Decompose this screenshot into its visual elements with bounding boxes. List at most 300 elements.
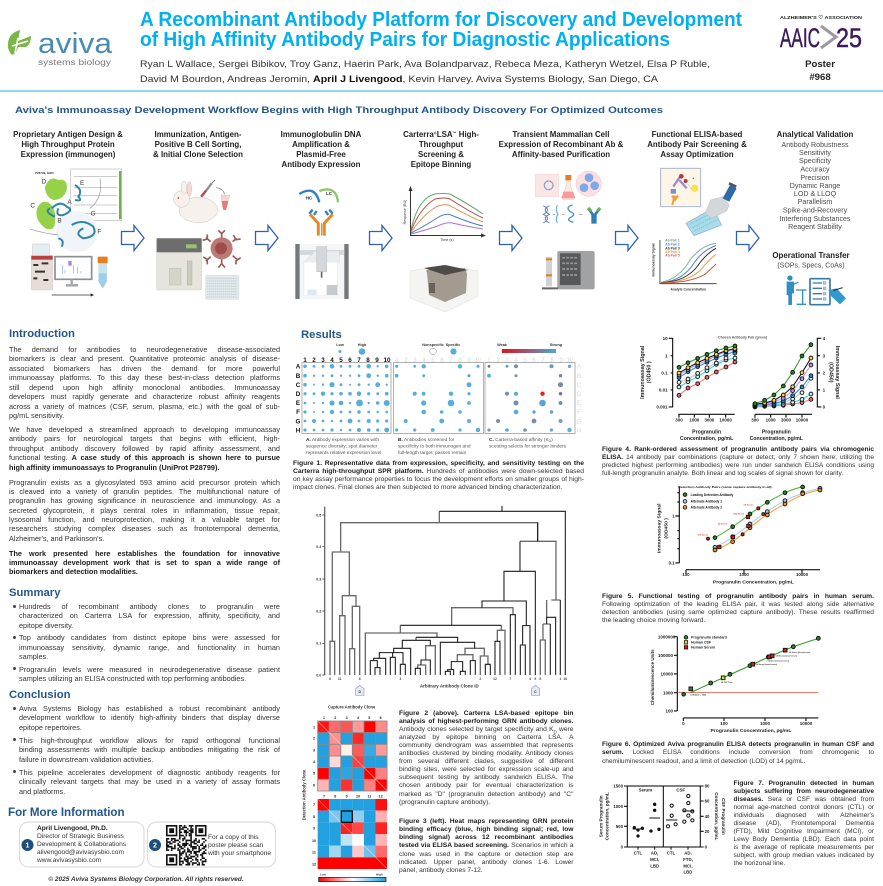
badge C xyxy=(531,685,540,695)
figure 7 chart: patient dot plots: FTD, xyxy=(683,857,693,862)
figure 7 chart: patient dot plots: 20 xyxy=(705,829,710,834)
figure 1 axis labels: 8 xyxy=(550,357,554,364)
figure 4 caption: Figure 4. Rank-ordered assessment of progranulin antibody pairs via chromogenic xyxy=(602,446,874,453)
figure 1 axis labels: F xyxy=(577,409,581,416)
figure 1 caption: impact clones. Final clones are then subjected to more advanced binding characterization. xyxy=(293,484,562,491)
figure 1 axis labels: 10 xyxy=(566,357,574,364)
figure 1 axis labels: H xyxy=(577,428,582,434)
icon: badge 1: 1 xyxy=(26,842,30,850)
figure 1 axis labels: A xyxy=(296,364,301,370)
figure 1 legends: Weak xyxy=(497,343,508,347)
step 4 icon: Carterra instrument xyxy=(410,265,478,312)
poster number: #968 xyxy=(809,72,831,83)
step 1 title: High Throughput Protein xyxy=(21,140,115,149)
figure 3 heat maps: 4 xyxy=(313,760,316,764)
figure 5 chart: serum testing curves: 100 xyxy=(682,572,690,577)
figure 2 dendrogram xyxy=(316,506,568,695)
analytical validation list: Reagent Stability xyxy=(788,223,842,231)
figure 2 dendrogram: 5 xyxy=(539,677,541,681)
analytical validation list: Interfering Substances xyxy=(780,215,851,223)
figure 1 axis labels: B xyxy=(577,373,581,380)
step 3 icons: HC LC arcs, antibody, liquid handler: LC xyxy=(326,191,332,196)
figure 4 chart: log and linear ELISA curves: 3 xyxy=(823,353,826,358)
step 1 icons: protein structure, bioreactor, monitor, tube: D xyxy=(42,178,47,185)
dendrogram branches xyxy=(330,511,560,675)
intro paragraph 3: progranulin has growing significance in neuroscience and immunology. As a xyxy=(9,496,280,505)
figure 4 chart: log and linear ELISA curves xyxy=(640,335,840,442)
intro paragraph 1 xyxy=(9,345,280,420)
step 3 title: Amplification & xyxy=(292,140,350,149)
step 1 icons: protein structure, bioreactor, monitor, tube: F xyxy=(97,228,101,235)
poster number: Poster xyxy=(805,59,835,70)
figure 5 chart: serum testing curves: 0.1 xyxy=(669,561,675,566)
step 2 title xyxy=(153,130,243,159)
color scale bar: Low xyxy=(320,873,327,877)
figure 1 axis labels: 2 xyxy=(496,357,500,364)
figure 4 chart: log and linear ELISA curves: Progranulin xyxy=(762,430,791,436)
figure 2 caption: from several different clades, suggestive of different xyxy=(399,758,574,765)
figure 1 axis labels: G xyxy=(577,418,582,426)
figure 1 axis labels: C xyxy=(296,382,301,389)
figure 1 axis labels: 10 xyxy=(474,357,482,364)
figure 3 caption xyxy=(399,818,574,874)
figure 4 caption: full-length progranulin analyte. Both linear and log scales of signal shown for clarity. xyxy=(602,470,843,477)
summary bullets: samples. xyxy=(19,652,48,661)
figure 3 heat maps: 5 xyxy=(313,772,315,776)
figure 7 chart: patient dot plots: 1000 xyxy=(613,804,624,809)
step 5 icons: cell, flask, DNA, antibody, bioreactor xyxy=(535,171,601,289)
figure 6 chart: progranulin ELISA standard curve: Progranulin Concentration, pg/mL xyxy=(711,728,791,734)
step 1 icons: protein structure, bioreactor, monitor, tube: B xyxy=(57,217,62,224)
figure 6 chart: progranulin ELISA standard curve: 1/4 Serum (donor/serum) xyxy=(789,651,811,654)
figure 6 chart: progranulin ELISA standard curve: 0 xyxy=(682,721,685,726)
figure 2 dendrogram: 9 xyxy=(534,677,536,681)
figure 5 caption: detection antibodies (using same optimized capture antibody). These results reaffirmed xyxy=(602,609,874,616)
step 6 chart: immunoassay curves: Ab Pair 4 xyxy=(665,250,680,254)
intro paragraph 2: functional testing. A case study of this approach is shown here to pursue xyxy=(9,453,280,462)
figure 4 chart: log and linear ELISA curves: 10 xyxy=(663,336,668,341)
authors: Ryan L Wallace, Sergei Bibikov, Troy Ganz, Haerin Park, Ava Bolandparvaz, Rebeca Meza, Katheryn Wetzel, Elsa P Ruble, xyxy=(140,59,710,69)
figure 2 dendrogram: Arbitrary Antibody Clone ID xyxy=(420,683,480,688)
figure 7 chart: patient dot plots: 1500 xyxy=(613,784,624,789)
step 3 title: Immunoglobulin DNA xyxy=(281,130,362,139)
figure 5 chart: serum testing curves: 50 Serum xyxy=(744,504,753,506)
step 5 title: Affinity-based Purification xyxy=(512,150,610,159)
figure 3 caption: indicated. Upper panel, antibody clones 1-6. Lower xyxy=(399,859,574,866)
figure 7 caption: individuals diagnosed with Alzheimer's xyxy=(734,812,874,819)
step 1 icons: protein structure, bioreactor, monitor, tube xyxy=(30,169,122,297)
operational transfer heading: (SOPs, Specs, CoAs) xyxy=(777,262,845,270)
step 4 title: Screening & xyxy=(418,150,464,159)
figure 2 dendrogram: 0.1 xyxy=(316,642,321,646)
figure 7 chart: patient dot plots: AD, xyxy=(684,850,692,855)
figure 5 chart: serum testing curves: Leading Detection Antibody xyxy=(691,493,733,497)
figure 2 dendrogram: 0.0 xyxy=(316,673,321,677)
intro paragraph 3 xyxy=(9,478,280,543)
figure 6 chart: progranulin ELISA standard curve: 10000 xyxy=(800,721,813,726)
figure 3 heat maps: 1 xyxy=(313,725,315,729)
figure 7 chart: patient dot plots: 500 xyxy=(616,824,624,829)
figure 3 heat maps: 2 xyxy=(313,736,315,740)
figure 5 caption: Figure 5. Functional testing of progranulin antibody pairs in human serum. xyxy=(602,593,874,600)
arrow 4 xyxy=(500,226,522,250)
figure 2 dendrogram: 7 xyxy=(509,677,511,681)
figure 3 caption: binding efficacy (blue, high binding signal; red, low xyxy=(399,826,574,833)
step 6 title: Antibody Pair Screening & xyxy=(647,140,747,149)
figure 4 chart: log and linear ELISA curves: 10000 xyxy=(719,418,732,423)
figure 6 chart: progranulin ELISA standard curve: 1/4 Serum (donor/serum) xyxy=(767,660,789,663)
figure 7 caption: diseases. Sera or CSF was obtained from xyxy=(734,796,874,803)
logo: aviva systems biology: aviva xyxy=(38,28,113,60)
figure 2 dendrogram: 6 xyxy=(329,677,331,681)
figure 1 axis labels: 3 xyxy=(413,357,417,364)
figure 5 chart: serum testing curves: 250 Serum xyxy=(733,513,744,515)
figure 1 axis labels: C xyxy=(577,382,582,389)
arrow 5 xyxy=(616,226,638,250)
step 4 title: Epitope Binning xyxy=(411,160,471,169)
figure 3 heat maps: 9 xyxy=(313,827,315,831)
summary bullets xyxy=(13,602,280,683)
figure 7 chart: patient dot plots: LBD xyxy=(684,870,692,875)
figure 1 axis labels: H xyxy=(296,428,301,434)
figure 5 chart: serum testing curves: (OD450 ) xyxy=(663,518,669,539)
figure 1 panel captions: scouting selects for stronger binders xyxy=(489,444,567,450)
figure 1 panel captions: ) xyxy=(551,437,553,443)
figure 4 chart: log and linear ELISA curves: 3000 xyxy=(781,418,791,423)
figure 4 chart: log and linear ELISA curves: 0 xyxy=(823,405,826,410)
step 6 chart: immunoassay curves: Ab Pair 2 xyxy=(665,243,680,247)
intro paragraph 4 xyxy=(9,549,280,576)
figure 7 chart: patient dot plots: Serum Progranulin xyxy=(598,795,603,837)
operational transfer heading xyxy=(772,251,850,270)
copyright: © 2025 Aviva Systems Biology Corporation. All rights reserved. xyxy=(48,876,244,883)
intro paragraph 4: immunoassay development work that is set to span a wide range of xyxy=(9,558,280,567)
analytical validation list: Specificity xyxy=(799,157,831,165)
figure 1 legends xyxy=(336,343,563,355)
figure 7 chart: patient dot plots: 60 xyxy=(705,799,710,804)
summary bullets: samples utilizing an ELISA constructed with top performing antibodies. xyxy=(19,674,246,683)
figure 3 heat maps: 3 xyxy=(346,716,348,720)
figure 7 chart: patient dot plots: Concentration, pg/mL xyxy=(714,792,719,841)
figure 6 chart: progranulin ELISA standard curve: 100000 xyxy=(658,653,673,658)
figure 6 chart: progranulin ELISA standard curve: 1000000 xyxy=(658,634,676,639)
heading: Conclusion: Conclusion xyxy=(9,689,71,701)
step 1 icons: protein structure, bioreactor, monitor, tube: G xyxy=(91,211,96,218)
figure 5 chart: serum testing curves: Detection Antibody Pairs (same capture antibody in all) xyxy=(678,486,772,489)
figure 3 caption: clone was used in the capture or detection step are xyxy=(399,851,574,858)
conclusion bullets: clinically relevant targets that may be used in a variety of assay formats xyxy=(19,777,280,786)
figure 2 dendrogram: 4 xyxy=(529,677,531,681)
figure 5 chart: serum testing curves: 1 xyxy=(672,514,675,519)
figure 7 chart: patient dot plots xyxy=(598,784,726,875)
step 3 title xyxy=(281,130,362,169)
figure 2 dendrogram: 2 xyxy=(479,677,481,681)
figure 1 panel captions: A. Antibody expression varies with xyxy=(306,437,379,443)
figure 3 heat maps xyxy=(301,704,387,882)
intro paragraph 2: throughput antibody discovery followed by rapid affinity assessment, and xyxy=(9,444,280,453)
figure 4 chart: log and linear ELISA curves: 300 xyxy=(675,418,683,423)
QR card frame xyxy=(148,822,276,867)
step 1 icons: protein structure, bioreactor, monitor, tube: E xyxy=(80,180,84,187)
figure 3 heat maps: 11 xyxy=(367,795,371,799)
figure 5 chart: serum testing curves: 50 Serum xyxy=(718,523,728,525)
step 1 icons: protein structure, bioreactor, monitor, tube: A xyxy=(67,199,72,206)
figure 1 axis labels: 7 xyxy=(541,357,545,364)
figure 2 dendrogram: 0.2 xyxy=(316,609,321,613)
panel A: expression dot matrix xyxy=(302,362,391,434)
figure 3 heat maps: 12 xyxy=(379,795,383,799)
figure 4 chart: log and linear ELISA curves: (OD450 ) xyxy=(647,361,653,383)
icon: badge 2 xyxy=(149,839,161,851)
figure 6 chart: progranulin ELISA standard curve: 1/4 Serum (donor/serum) xyxy=(755,663,777,666)
QR caption: For a copy of this xyxy=(208,834,259,840)
figure 4 chart: log and linear ELISA curves: Concentration, pg/mL xyxy=(680,436,733,442)
intro paragraph 3: lysosomal function, and neuroprotection, making it a valuable target for xyxy=(9,515,280,524)
figure 4 chart: log and linear ELISA curves: 1000 xyxy=(689,418,700,423)
intro paragraph 2: high affinity immunoassays to Progranulin (UniProt P28799). xyxy=(9,463,219,472)
figure 7 chart: patient dot plots: LBD xyxy=(650,863,659,868)
analytical validation list xyxy=(777,130,854,231)
step 3 title: Antibody Expression xyxy=(282,160,361,169)
summary bullets: Progranulin levels were measured in neurodegenerative disease patient xyxy=(19,664,280,674)
figure 1 axis labels: 2 xyxy=(404,357,408,364)
figure 3 heat maps: 7 xyxy=(313,803,315,807)
arrow 1 xyxy=(122,226,144,250)
figure 2 dendrogram: 11 xyxy=(338,677,342,681)
conclusion bullets: This pipeline accelerates development of diagnostic antibody reagents for xyxy=(19,768,280,776)
step 6 chart: immunoassay curves: Ab Pair 1 xyxy=(665,239,680,243)
figure 1 legends: Nonspecific xyxy=(422,343,444,347)
step 4 title: Carterra xyxy=(403,130,434,139)
summary bullets: Top antibody candidates from distinct epitope bins were assessed for xyxy=(19,633,280,642)
analytical validation list: Dynamic Range xyxy=(790,182,840,190)
figure 7 chart: patient dot plots: CSF Progranulin xyxy=(721,798,726,835)
figure 1 axis labels: G xyxy=(296,418,301,426)
figure 7 caption: subjects suffering from neurodegenerative xyxy=(734,788,874,795)
step 1 title xyxy=(13,130,123,159)
figure 1 panel captions: specificity to both immunogen and xyxy=(398,444,471,450)
figure 6 caption: serum. Locked ELISA conditions include conversion from chromogenic to xyxy=(602,749,874,756)
figure 7 caption: (FTD), Mild Cognitive Impairment (MCI), or xyxy=(734,828,874,835)
analytical validation list: Sensitivity xyxy=(799,149,831,157)
conclusion bullets: failure in downstream validation activities. xyxy=(19,754,153,764)
step 1 title: Expression (immunogen) xyxy=(21,150,116,159)
lower heat map xyxy=(318,799,387,869)
figure 1 panel captions xyxy=(306,437,567,456)
figure 1 axis labels: 7 xyxy=(449,357,453,364)
figure 7 chart: patient dot plots: 80 xyxy=(705,784,710,789)
intro paragraph 4: biomarkers and detection modalities. xyxy=(9,567,138,576)
figure 1 axis labels: 5 xyxy=(523,357,527,364)
figure 6 chart: progranulin ELISA standard curve xyxy=(650,634,820,734)
figure 1 axis labels: 2 xyxy=(312,357,316,364)
logo: AAIC 25 xyxy=(780,15,863,53)
figure 1 legends: Low xyxy=(336,343,344,347)
summary bullets: immunoassay sensitivity, dynamic range, and functionality in human xyxy=(19,642,280,652)
figure 3 heat maps: 6 xyxy=(380,716,382,720)
figure 6 chart: progranulin ELISA standard curve: 1000 xyxy=(760,721,770,726)
figure 1 axis labels: 3 xyxy=(321,357,325,364)
intro paragraph 2 xyxy=(9,425,280,472)
figure 6 chart: progranulin ELISA standard curve: Progranulin standard xyxy=(691,636,727,640)
figure 1 axis labels: 9 xyxy=(375,357,379,364)
figure 4 chart: log and linear ELISA curves: 1 xyxy=(823,388,826,393)
logo: aviva systems biology: systems biology xyxy=(38,57,112,67)
contact details: alivengood@avivasysbio.com xyxy=(37,849,124,856)
title: of High Affinity Antibody Pairs for Diagnostic Applications xyxy=(140,29,670,51)
figure 3 heat maps: 7 xyxy=(323,795,325,799)
step 2 title: Immunization, Antigen- xyxy=(155,130,242,139)
figure 5 caption: the leading choice moving forward. xyxy=(602,617,705,624)
figure 5 caption: Following optimization of the leading ELISA pair, it was tested along side alternative xyxy=(602,601,874,608)
figure 1 panel captions: full-length target; passes remain xyxy=(398,450,467,456)
figure 1 axis labels: 4 xyxy=(330,357,334,364)
badge D: D xyxy=(358,690,361,694)
color scale bar: High xyxy=(376,873,383,877)
step 5 title: Transient Mammalian Cell xyxy=(513,130,609,139)
step 4 title: LSA xyxy=(437,130,453,139)
intro paragraph 2: We have developed a streamlined approach to developing immunoassay xyxy=(9,425,280,434)
figure 1 caption: on key assay performance properties to focus the development efforts on smaller groups of high- xyxy=(293,476,584,483)
figure 4 chart: log and linear ELISA curves: 2 xyxy=(823,371,826,376)
step 6 icons: ELISA well, pipette, plate xyxy=(661,168,737,236)
figure 6 chart: progranulin ELISA standard curve: 1/4 CSF Tests xyxy=(721,681,733,684)
step 4 chart: SPR sensorgram xyxy=(403,186,486,242)
figure 3 heat maps: 12 xyxy=(312,862,316,866)
figure 6 chart: progranulin ELISA standard curve: 1000 xyxy=(663,690,673,695)
figure 3 caption: Figure 3 (left). Heat maps representing GRN protein xyxy=(399,818,574,825)
figure 3 heat maps: Capture Antibody Clone xyxy=(328,704,376,709)
figure 1 axis labels: E xyxy=(296,400,300,407)
figure 1 legends: Strong xyxy=(550,343,563,347)
figure 3 caption: tested via ELISA based screening. Scenarios in which a xyxy=(399,842,574,849)
workflow heading: Aviva's Immunoassay Development Workflow Begins with High Throughput Antibody Discovery For Optimized Outcomes xyxy=(15,105,663,116)
figure 7 chart: patient dot plots: 40 xyxy=(705,814,710,819)
icon: badge 2: 2 xyxy=(153,842,157,850)
figure 6 chart: progranulin ELISA standard curve: 100 xyxy=(720,721,728,726)
figure 6 chart: progranulin ELISA standard curve: Human Serum xyxy=(691,646,715,650)
arrow 2 xyxy=(256,226,278,250)
summary bullets: Hundreds of recombinant antibody clones to progranulin were xyxy=(19,602,280,610)
figure 1 axis labels: 9 xyxy=(559,357,563,364)
analytical validation list: Accuracy xyxy=(800,166,830,174)
figure 1 axis labels: 3 xyxy=(505,357,509,364)
heading: For More Information: For More Information xyxy=(8,806,125,819)
figure 4 chart: log and linear ELISA curves: Chosen Antibody Pair (green) xyxy=(718,335,767,339)
intro paragraph 1: associated biomarkers has driven the demand for more powerful xyxy=(9,364,280,373)
QR code xyxy=(166,826,206,865)
arrow 3 xyxy=(370,226,392,250)
logo: aviva systems biology xyxy=(8,28,113,67)
figure 3 heat maps: 8 xyxy=(334,795,336,799)
title: A Recombinant Antibody Platform for Discovery and Development xyxy=(140,9,742,31)
figure 4 chart: log and linear ELISA curves: 3000 xyxy=(704,418,715,423)
figure 4 chart: log and linear ELISA curves: 0.01 xyxy=(659,388,668,393)
figure 3 heat maps: Detection Antibody Clone xyxy=(301,769,306,820)
figure 7 chart: patient dot plots: AD, xyxy=(651,850,658,855)
intro paragraph 3: is cleaved into a variety of granulin peptides. The multifunctional nature of xyxy=(9,487,280,496)
step 4 title xyxy=(403,130,479,169)
step 6 title xyxy=(647,130,747,159)
step 6 chart: immunoassay curves: Analyte Concentration xyxy=(671,288,706,292)
figure 1 axis labels: 6 xyxy=(348,357,352,364)
figure 4 chart: log and linear ELISA curves: 1000 xyxy=(766,418,776,423)
summary bullets: characterized on Carterra LSA for expression, affinity, specificity, and xyxy=(19,611,280,620)
conclusion bullets: Aviva Systems Biology has established a robust recombinant antibody xyxy=(19,704,280,712)
figure 1 axis labels: B xyxy=(296,373,301,380)
badge C: C xyxy=(534,690,537,694)
figure 7 chart: patient dot plots: CTL xyxy=(667,850,676,855)
contact card frame xyxy=(20,822,144,867)
intro paragraph 4: The work presented here establishes the foundation for innovative xyxy=(9,549,280,558)
analytical validation list: Antibody Robustness xyxy=(781,141,849,149)
analytical validation list: LOD & LLOQ xyxy=(794,190,837,198)
figure 1 axis labels: A xyxy=(577,364,582,370)
figure 6 chart: progranulin ELISA standard curve: 1/4 Serum (donor/serum) xyxy=(775,655,797,658)
step 3 icons: HC LC arcs, antibody, liquid handler xyxy=(295,189,349,299)
figure 2 caption xyxy=(399,710,574,806)
intro paragraph 3: Progranulin exists as a glycosylated 593 amino acid precursor protein which xyxy=(9,478,280,487)
figure 2 caption: chosen antibody pair for eventual characterization is xyxy=(399,782,574,789)
figure 2 caption: analyzed by epitope binning on Carterra LSA. A xyxy=(399,734,574,741)
figure 2 dendrogram: 0.5 xyxy=(316,513,321,517)
authors: David M Bourdon, Andreas Jeromin, April J Livengood , Kevin Harvey. Aviva Systems Biology, San Diego, CA xyxy=(140,74,659,84)
step 6 title: Assay Optimization xyxy=(660,150,734,159)
figure 3 caption: binding signal) across 12 recombinant antibodies xyxy=(399,834,574,841)
operational transfer heading: Operational Transfer xyxy=(772,251,850,260)
figure 1 caption: Figure 1. Representative data from expression, specificity, and sensitivity testing on the xyxy=(293,460,584,467)
figure 1 panel captions: C. Carterra-based affinity (K xyxy=(489,438,549,443)
intro paragraph 3: Alzheimer's, and Parkinson's. xyxy=(9,534,104,543)
figure 2 dendrogram: 12 xyxy=(493,677,497,681)
figure 6 chart: progranulin ELISA standard curve: Human CSF xyxy=(691,641,712,645)
figure 1 axis labels: 6 xyxy=(532,357,536,364)
figure 4 caption: ELISA. 14 antibody pair combinations (capture or detect; only 7 shown here; utilizing the xyxy=(602,454,874,461)
step 2 title: Positive B Cell Sorting, xyxy=(155,140,241,149)
step 5 title: Expression of Recombinant Ab & xyxy=(499,140,624,149)
step 2 icons: rabbit, cell sorter, B cell, plate xyxy=(157,180,241,299)
figure 1 axis labels: 10 xyxy=(383,357,391,364)
step 4 title: High- xyxy=(457,130,479,139)
figure 1 axis labels: 7 xyxy=(357,357,361,364)
icon: badge 1 xyxy=(22,839,34,851)
step 4 chart: SPR sensorgram: Time (s) xyxy=(440,238,454,242)
heading: Summary: Summary xyxy=(9,587,60,599)
figure 4 chart: log and linear ELISA curves: Immunoassay Signal xyxy=(640,345,646,399)
logo: AAIC 25: AAIC xyxy=(780,23,820,53)
conclusion bullets: binding assessments with multiple backup antibodies mitigating the risk of xyxy=(19,745,280,754)
step 1 title: Proprietary Antigen Design & xyxy=(13,130,123,139)
contact details: www.avivasysbio.com xyxy=(37,857,101,864)
figure 5 chart: serum testing curves: 10000 xyxy=(796,572,809,577)
figure 3 heat maps: 10 xyxy=(312,839,316,843)
figure 2 caption: Figure 2 (above). Carterra LSA-based epitope bin xyxy=(399,710,574,717)
conclusion bullets: development workflow to identify high-affinity binders that display diverse xyxy=(19,713,280,722)
conclusion bullets: and platforms. xyxy=(19,786,65,796)
figure 5 chart: serum testing curves: Alternate Antibody 1 xyxy=(691,500,722,504)
intro paragraph 3: secreted glycoprotein, it plays central roles in inflammation, tissue repair, xyxy=(9,506,280,515)
figure 5 chart: serum testing curves: 1000 xyxy=(739,572,749,577)
figure 7 caption xyxy=(734,780,874,867)
figure 1 axis labels: E xyxy=(577,400,581,407)
step 6 title: Functional ELISA-based xyxy=(652,130,743,139)
figure 2 caption: (progranulin capture antibody). xyxy=(399,799,490,806)
figure 7 chart: patient dot plots: 0 xyxy=(621,845,624,850)
analytical validation list: Parallelism xyxy=(798,198,832,206)
step 3 title: Plasmid-Free xyxy=(296,150,346,159)
poster number xyxy=(805,59,835,83)
figure 4 chart: log and linear ELISA curves: 4 xyxy=(823,336,826,341)
